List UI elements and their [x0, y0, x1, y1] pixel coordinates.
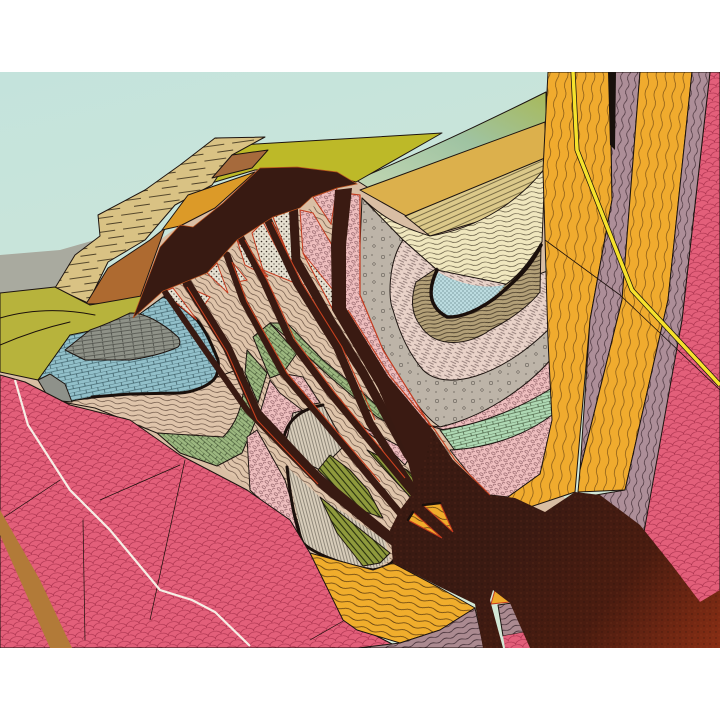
pink scale stratum [425, 358, 552, 430]
bottom orange stratum [310, 553, 475, 643]
left green hill [0, 287, 147, 380]
upper wedges [163, 188, 337, 320]
grey core [65, 313, 180, 360]
rock fractures [0, 460, 400, 648]
olive band right [367, 450, 437, 500]
cream wavy stratum [362, 168, 545, 286]
blue stippled core [432, 272, 505, 317]
lilac stratum [390, 240, 550, 380]
main trunk and lower mass [331, 188, 720, 648]
white top margin [0, 0, 720, 72]
intrusion texture [390, 430, 720, 648]
grey toe [38, 374, 72, 402]
yellow strata band [405, 158, 545, 236]
brown cliff base [86, 228, 165, 304]
dark intrusion [133, 167, 720, 648]
orange tips [408, 503, 453, 538]
top cap [133, 167, 357, 318]
pink rock lower left [0, 375, 400, 648]
crack line [545, 240, 720, 390]
orange column left [490, 72, 612, 512]
green brick stratum [440, 388, 552, 452]
brown mesa strip [212, 150, 268, 178]
lower grey lens [287, 467, 390, 570]
brown diagonal streak [0, 510, 72, 648]
brown fold band [413, 244, 541, 342]
black fissure [608, 72, 616, 150]
black fold outline [92, 296, 218, 397]
white vein [15, 380, 250, 646]
olive bands centre [347, 450, 408, 520]
pink strip beside trunk [340, 193, 430, 425]
grey line lens [285, 405, 345, 470]
small pink lobe [503, 632, 530, 648]
folded wedge base rock [130, 190, 500, 570]
yellow vein [573, 72, 720, 385]
blue brick fold [38, 296, 219, 402]
small purple lobe [498, 603, 525, 636]
far green hillside [356, 92, 546, 194]
green band lower left [157, 372, 256, 466]
orange cliff ledge [162, 172, 255, 230]
small orange lobe [491, 590, 510, 604]
branches [165, 200, 440, 548]
purple column right [596, 72, 710, 532]
tan fold under blue [62, 368, 256, 452]
hill strata lines [0, 311, 95, 345]
yellow-green plateau [205, 133, 442, 185]
tip outlines [408, 503, 440, 520]
tan mesa cliffs [55, 137, 265, 303]
green wedges [245, 323, 407, 433]
lens outlines [283, 405, 393, 570]
black core outline [431, 245, 541, 317]
ochre hill band [360, 122, 545, 218]
sky [0, 72, 720, 648]
white bottom margin [0, 648, 720, 720]
ground fill behind strata [0, 100, 600, 570]
pink wedges [247, 373, 412, 540]
bottom purple stratum [358, 608, 484, 648]
purple column [580, 72, 640, 470]
pink rock right [620, 72, 720, 648]
red edges [187, 222, 490, 495]
distant grey mountains [0, 240, 95, 294]
olive lens upper [318, 455, 383, 518]
grey pebble stratum [358, 198, 552, 427]
olive lens lower [320, 497, 390, 566]
orange column right [578, 72, 692, 492]
pink pebble stratum [450, 415, 552, 497]
